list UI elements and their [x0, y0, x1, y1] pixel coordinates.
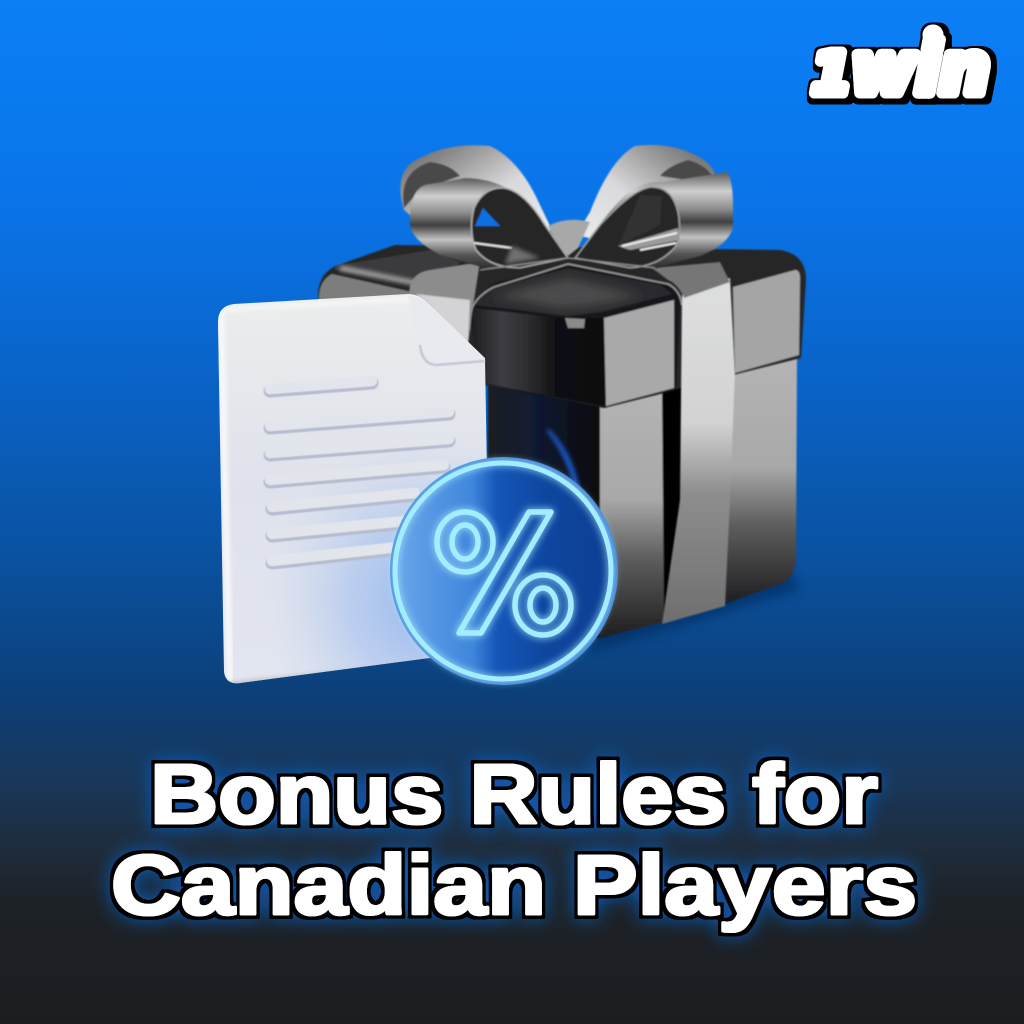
logo: 1win: 1win [812, 28, 989, 110]
gift lid [318, 245, 806, 408]
bow knot [548, 220, 590, 256]
bow back right loop [576, 145, 716, 250]
document text lines [270, 381, 449, 563]
title line 2: Canadian Players [111, 839, 917, 933]
bow front left loop [410, 178, 568, 269]
bow back left loop [400, 145, 552, 245]
ribbon bow [400, 145, 733, 270]
coin neon ring [395, 463, 611, 679]
gift box [318, 145, 806, 650]
title line 1: Bonus Rules for [150, 747, 878, 841]
percent sign [437, 512, 571, 635]
title [111, 747, 917, 933]
ribbon band [408, 262, 735, 624]
bow front right loop [575, 172, 733, 268]
ground shadow [470, 570, 800, 650]
box body [488, 355, 797, 650]
percent coin [390, 457, 618, 685]
document folded corner [408, 296, 485, 365]
document page [218, 294, 487, 684]
